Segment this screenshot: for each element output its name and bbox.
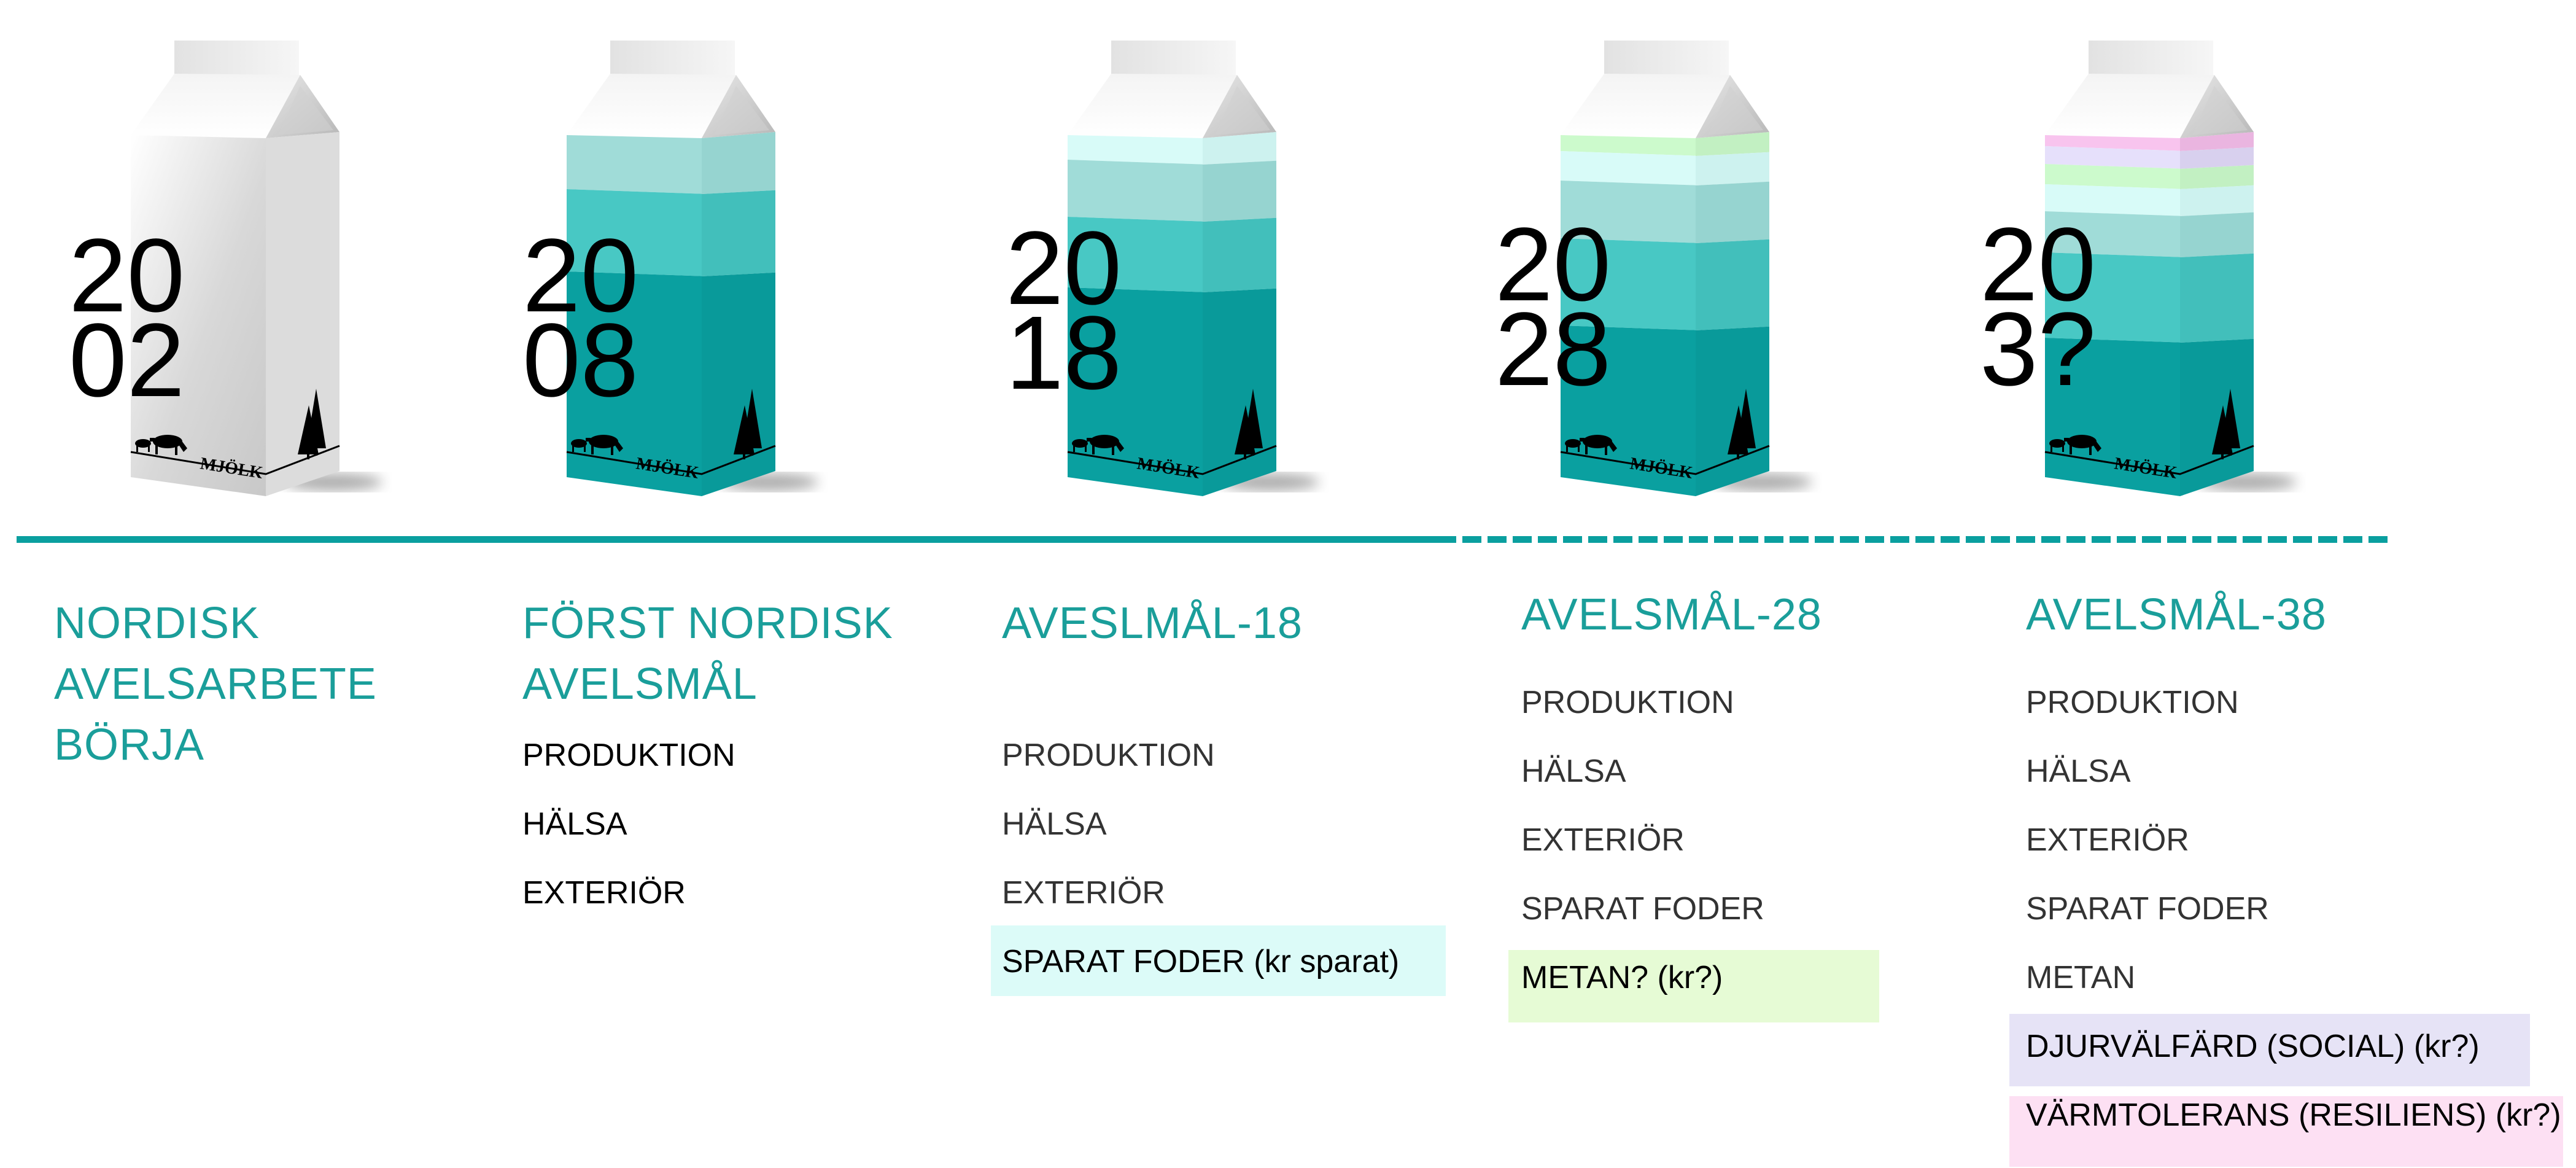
items col4: SPARAT FODER [1521, 891, 1764, 927]
items col5 [2026, 685, 2561, 1133]
items col2: EXTERIÖR [522, 875, 686, 911]
highlight: sparat foder [991, 925, 1446, 996]
items col4: EXTERIÖR [1521, 822, 1685, 858]
cartons illustration [17, 41, 2388, 543]
highlight: djurvälfärd [2009, 1014, 2530, 1086]
carton 203? [2045, 41, 2297, 650]
items col2: HÄLSA [522, 806, 627, 842]
items col4: PRODUKTION [1521, 685, 1734, 720]
items col2 [522, 738, 735, 911]
heading col4: AVELSMÅL-28 [1521, 590, 1822, 639]
heading col1 [54, 599, 377, 769]
items col5: EXTERIÖR [2026, 822, 2189, 858]
year 2008: 20 08 [522, 217, 638, 419]
timeline dashed [1462, 536, 2391, 543]
items col4 [1521, 685, 1764, 995]
year 2018: 20 18 [1006, 210, 1122, 411]
heading col1: AVELSARBETE [54, 660, 377, 709]
year 203?: 20 3? [1980, 206, 2096, 408]
items col5: HÄLSA [2026, 753, 2131, 789]
items col3: HÄLSA [1002, 806, 1107, 842]
year 2028: 20 28 [1495, 206, 1611, 408]
items col4: METAN? (kr?) [1521, 960, 1723, 995]
carton 2002 [131, 41, 382, 496]
heading col5: AVELSMÅL-38 [2026, 590, 2327, 639]
items col5: VÄRMTOLERANS (RESILIENS) (kr?) [2026, 1097, 2561, 1133]
items col4: HÄLSA [1521, 753, 1626, 789]
heading col2 [522, 599, 893, 709]
heading col3: AVESLMÅL-18 [1002, 599, 1303, 648]
heading col2: FÖRST NORDISK [522, 599, 893, 648]
carton 2018 [1068, 41, 1319, 599]
carton 2008 [567, 41, 818, 583]
highlight: metan [1508, 950, 1879, 1022]
year 2002: 20 02 [69, 217, 185, 419]
items col2: PRODUKTION [522, 738, 735, 773]
items col3: SPARAT FODER (kr sparat) [1002, 944, 1399, 979]
items col3: EXTERIÖR [1002, 875, 1165, 911]
heading col1: BÖRJA [54, 720, 204, 769]
items col5: PRODUKTION [2026, 685, 2239, 720]
heading col1: NORDISK [54, 599, 260, 648]
highlight: värmtolerans [2009, 1096, 2563, 1167]
heading col2: AVELSMÅL [522, 660, 758, 709]
carton 2028 [1561, 41, 1812, 637]
items col3: PRODUKTION [1002, 738, 1215, 773]
items col5: METAN [2026, 960, 2135, 995]
items col5: DJURVÄLFÄRD (SOCIAL) (kr?) [2026, 1029, 2480, 1064]
items col5: SPARAT FODER [2026, 891, 2269, 927]
timeline solid [17, 536, 1456, 543]
items col3 [1002, 738, 1399, 979]
